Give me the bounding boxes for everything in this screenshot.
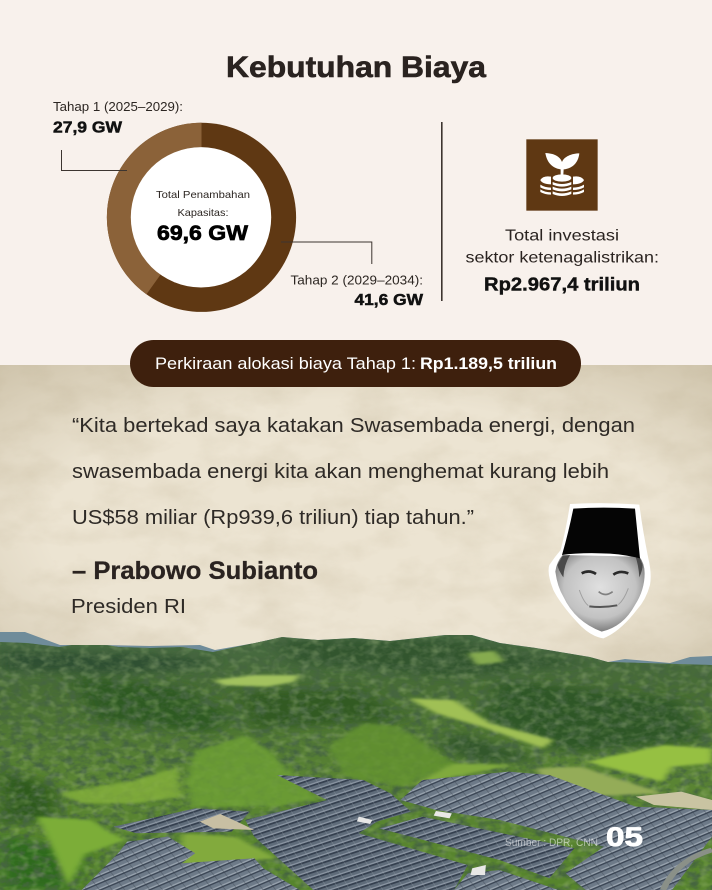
grass patches (36, 651, 712, 887)
quote: US$58 miliar (Rp939,6 triliun) tiap tahun.” (72, 507, 474, 529)
allocation pill (130, 340, 581, 387)
center label: Total Penambahan (156, 189, 250, 201)
portrait: Prabowo Subianto (549, 503, 651, 638)
landscape photo (0, 620, 712, 890)
leader line: Tahap 2 (281, 242, 372, 264)
label: Tahap 1: Tahap 1 (2025–2029): (53, 100, 183, 114)
title: Kebutuhan Biaya (226, 51, 486, 84)
segment: Tahap 1 (107, 123, 202, 294)
solar panel arrays (82, 772, 712, 890)
investment text (466, 228, 659, 294)
center label: 69,6 GW (157, 222, 248, 245)
attribution (71, 557, 318, 618)
face (555, 555, 645, 632)
attribution: – Prabowo Subianto (72, 557, 318, 585)
center label: Kapasitas: (178, 207, 228, 219)
allocation pill: Perkiraan alokasi biaya Tahap 1: (155, 355, 416, 373)
tree canopy texture (0, 625, 712, 890)
center label (156, 189, 250, 245)
distant mountains (0, 632, 712, 665)
label: Tahap 1: 27,9 GW (53, 120, 123, 136)
allocation pill: Rp1.189,5 triliun (420, 355, 557, 373)
investment text: Rp2.967,4 triliun (484, 274, 640, 294)
top panel background (0, 0, 712, 366)
paper texture panel (0, 365, 712, 665)
donut chart (107, 123, 296, 312)
peci cap (562, 508, 640, 558)
label: Tahap 2: 41,6 GW (354, 292, 424, 309)
page number: 05 (606, 822, 643, 852)
label: Tahap 1 (53, 100, 183, 136)
hair sides (557, 555, 643, 577)
eyes, nose, mouth (579, 571, 628, 607)
forest hills and vegetation (0, 620, 712, 890)
donut hole (131, 147, 271, 288)
quote: “Kita bertekad saya katakan Swasembada energi, dengan (72, 415, 635, 437)
quote: swasembada energi kita akan menghemat kurang lebih (72, 461, 609, 483)
label: Tahap 2 (290, 274, 424, 309)
leaf highlights (0, 625, 712, 890)
icon: coins and sprout (526, 139, 598, 211)
divider (441, 122, 443, 301)
source note: Sumber : DPR, CNN (505, 837, 598, 849)
attribution: Presiden RI (71, 596, 186, 618)
leader line: Tahap 1 (62, 150, 127, 170)
investment text: Total investasi (505, 228, 619, 244)
investment text: sektor ketenagalistrikan: (466, 250, 659, 266)
quote (72, 415, 635, 529)
label: Tahap 2: Tahap 2 (2029–2034): (290, 274, 423, 288)
